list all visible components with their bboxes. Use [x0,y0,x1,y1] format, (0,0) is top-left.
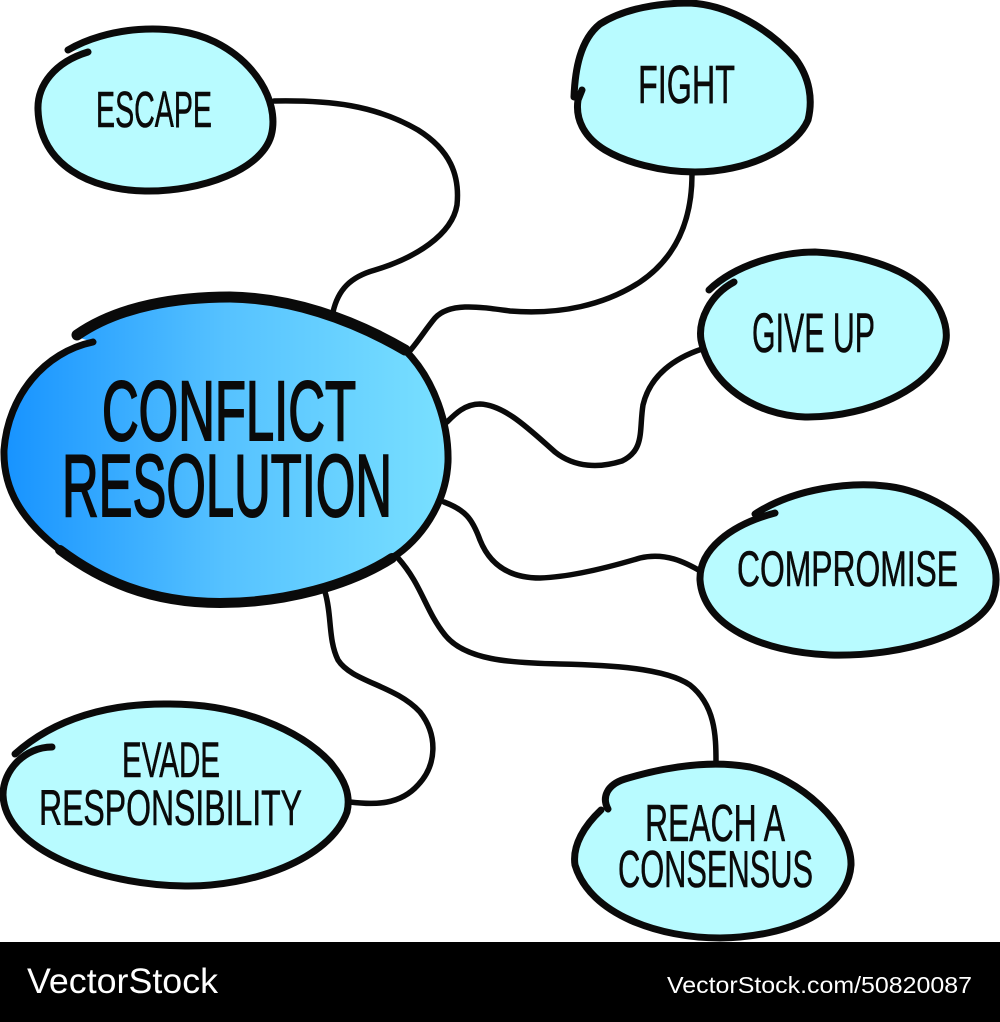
footer url: VectorStock.com/50820087 [667,972,972,998]
connector: compromise [444,502,702,578]
label: give up: GIVE UP [752,301,875,364]
node: evade responsibility [3,704,348,886]
node: escape [38,29,273,191]
footer bar [0,942,1000,1022]
label: evade responsibility: EVADE [122,732,220,788]
label: escape: ESCAPE [96,81,212,138]
connector: fight [408,174,692,353]
connector: reach a consensus [398,558,716,762]
central title: RESOLUTION [62,436,392,535]
label: reach a consensus: REACH A [645,795,785,853]
connector: evade responsibility [325,592,433,803]
central title [62,364,392,535]
label: evade responsibility: RESPONSIBILITY [39,780,302,836]
label: reach a consensus [618,795,813,899]
node: give up [701,252,946,417]
label: evade responsibility [39,732,302,836]
central title: CONFLICT [102,364,356,458]
node: central topic [4,297,448,603]
node: fight [574,3,810,172]
node: reach a consensus [575,764,851,938]
connector: give up [447,349,702,465]
node: compromise [700,485,996,655]
label: fight: FIGHT [638,55,735,115]
connector: escape [274,101,458,312]
label: reach a consensus: CONSENSUS [618,841,813,899]
footer brand: VectorStock [27,962,219,1001]
